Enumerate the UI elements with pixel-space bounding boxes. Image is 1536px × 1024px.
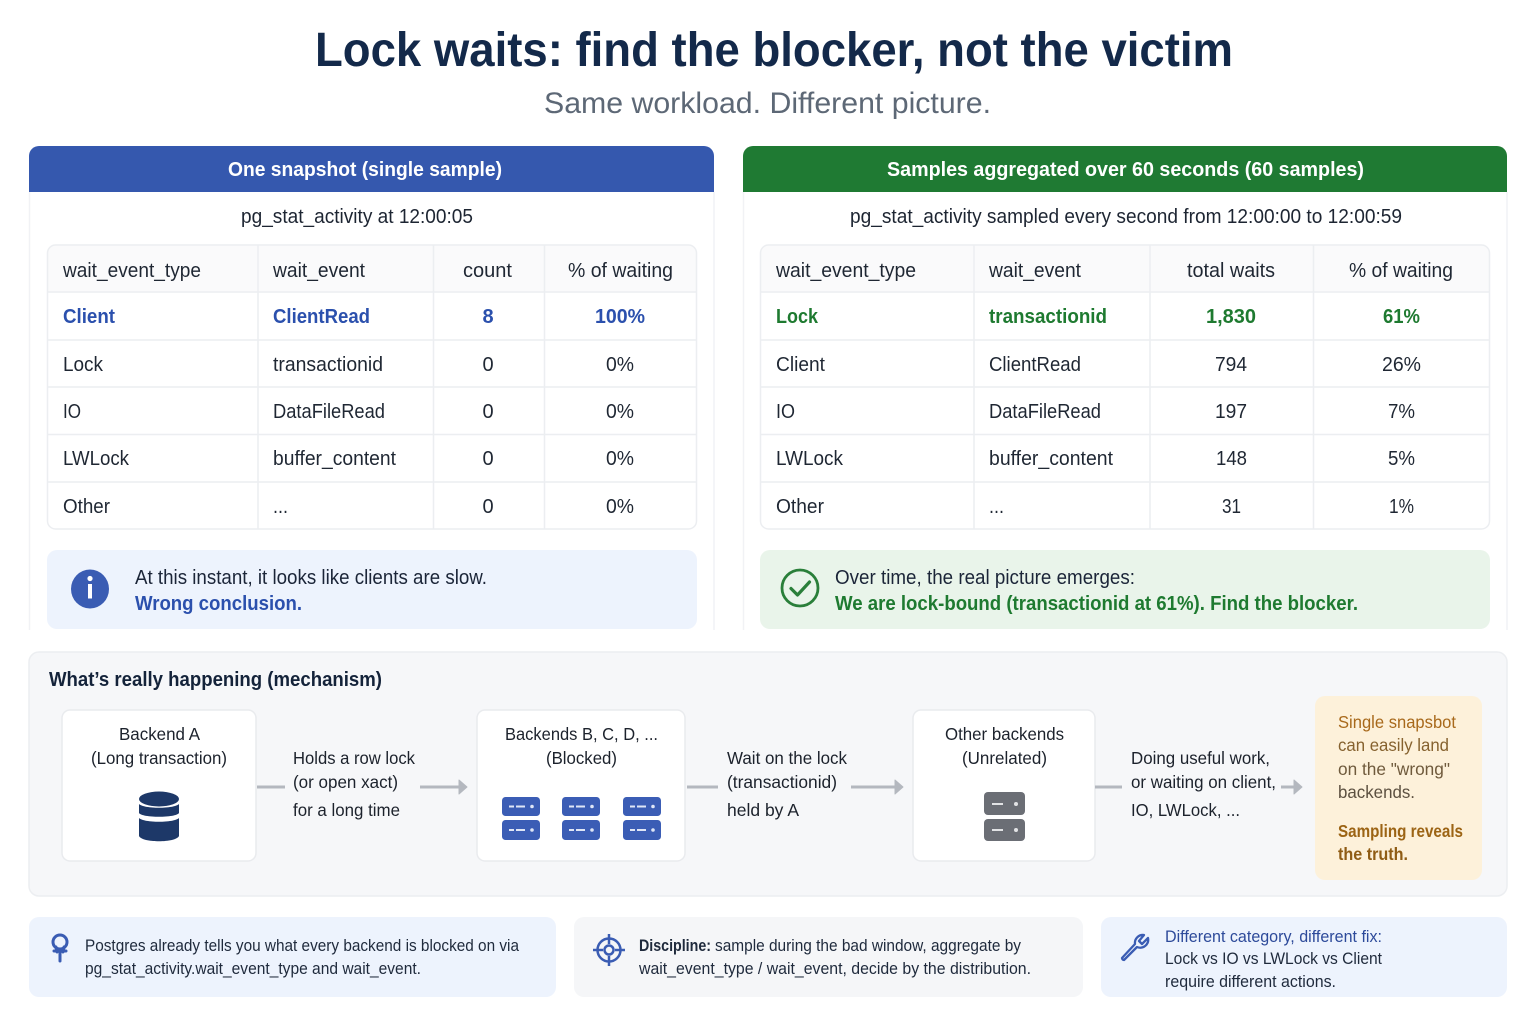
table: snapshot wait events: ... [273, 496, 288, 518]
callout: sampling note: backends. [1338, 782, 1415, 802]
callout: sampling note: on the "wrong" [1338, 759, 1450, 779]
table: snapshot wait events: transactionid [273, 354, 383, 376]
table: aggregated wait events: buffer_content [989, 448, 1113, 470]
mechanism heading: What’s really happening (mechanism) [49, 669, 382, 691]
panel caption: snapshot time: pg_stat_activity at 12:00:05 [241, 206, 473, 228]
table: aggregated wait events: LWLock [776, 448, 844, 470]
table: snapshot wait events: ClientRead [273, 306, 370, 328]
callout: discipline [574, 917, 1083, 997]
table: snapshot wait events: wait_event [272, 260, 365, 282]
table: aggregated wait events: ClientRead [989, 354, 1081, 376]
table: snapshot wait events: IO [63, 401, 81, 423]
table: aggregated wait events: Client [776, 354, 825, 376]
table: aggregated wait events: 1% [1389, 496, 1414, 518]
connector: other to note: or waiting on client, [1131, 772, 1276, 792]
callout: different fix: Lock vs IO vs LWLock vs Client [1165, 950, 1382, 968]
callout: different fix: Different category, different fix: [1165, 928, 1382, 946]
box: blocked backends: Backends B, C, D, ... [505, 724, 658, 744]
table: aggregated wait events: 26% [1382, 354, 1421, 376]
table: aggregated wait events: 1,830 [1206, 306, 1256, 328]
callout: wrong conclusion: Wrong conclusion. [135, 593, 302, 615]
table: aggregated wait events: 7% [1388, 401, 1415, 423]
connector: blocked to other [687, 748, 903, 820]
table: aggregated wait events: wait_event [988, 260, 1081, 282]
table: snapshot wait events: wait_event_type [62, 260, 201, 282]
table: aggregated wait events [760, 245, 1490, 529]
table: snapshot wait events: 0% [606, 401, 634, 423]
table: aggregated wait events: 148 [1216, 448, 1247, 470]
table: snapshot wait events: 100% [595, 306, 645, 328]
table: snapshot wait events: Other [63, 496, 110, 518]
table: snapshot wait events: DataFileRead [273, 401, 385, 423]
callout: real picture [760, 550, 1490, 629]
icon: wrench [1122, 935, 1148, 960]
table: snapshot wait events: 0% [606, 448, 634, 470]
title: Lock waits: find the blocker, not the victim [315, 24, 1233, 77]
connector: blocked to other: (transactionid) [727, 772, 837, 792]
box: blocked backends [477, 710, 685, 861]
callout: postgres tells you: pg_stat_activity.wait_event_type and wait_event. [85, 960, 421, 978]
table: aggregated wait events: Lock [776, 306, 819, 328]
table: snapshot wait events: Client [63, 306, 115, 328]
icon: database [139, 792, 179, 841]
callout: discipline: sample during the bad window, aggregate by [715, 937, 1022, 955]
table: aggregated wait events: Other [776, 496, 824, 518]
callout: discipline: wait_event_type / wait_event, decide by the distribution. [638, 960, 1031, 978]
table: aggregated wait events: ... [989, 496, 1004, 518]
table: snapshot wait events: LWLock [63, 448, 130, 470]
callout: sampling note [1315, 696, 1482, 880]
connector: other to note [1095, 748, 1302, 820]
table: snapshot wait events: count [463, 260, 512, 282]
connector: other to note: Doing useful work, [1131, 748, 1270, 768]
table: snapshot wait events: buffer_content [273, 448, 396, 470]
callout: discipline: Discipline: [639, 937, 711, 955]
callout: different fix: require different actions. [1165, 973, 1336, 991]
table: aggregated wait events: 31 [1222, 496, 1241, 518]
callout: sampling note: Sampling reveals [1338, 821, 1463, 841]
connector: blocked to other: held by A [727, 800, 799, 820]
panel caption: sampling window: pg_stat_activity sampled every second from 12:00:00 to 12:00:59 [850, 206, 1402, 228]
table: snapshot wait events: 0 [482, 354, 494, 376]
box: other backends [913, 710, 1095, 861]
panel: aggregated samples [743, 146, 1507, 630]
table: snapshot wait events [47, 245, 697, 529]
callout: sampling note: the truth. [1338, 844, 1408, 864]
icon: info [71, 570, 109, 608]
callout: sampling note: Single snapsbot [1338, 712, 1456, 732]
callout: postgres tells you: Postgres already tells you what every backend is blocked on via [85, 937, 520, 955]
table: aggregated wait events: 794 [1215, 354, 1247, 376]
panel: mechanism [29, 652, 1507, 997]
panel header: aggregated samples: Samples aggregated over 60 seconds (60 samples) [887, 159, 1364, 181]
table: snapshot wait events: 0 [482, 401, 494, 423]
callout: wrong conclusion [47, 550, 697, 629]
table: snapshot wait events: 8 [482, 306, 494, 328]
table: aggregated wait events: % of waiting [1349, 260, 1453, 282]
box: blocked backends: (Blocked) [546, 748, 617, 768]
callout: real picture: We are lock-bound (transactionid at 61%). Find the blocker. [835, 593, 1358, 615]
box: other backends: (Unrelated) [962, 748, 1047, 768]
table: aggregated wait events: total waits [1187, 260, 1275, 282]
connector: blocked to other: Wait on the lock [727, 748, 847, 768]
table: snapshot wait events: % of waiting [568, 260, 673, 282]
box: backend A: Backend A [119, 724, 200, 744]
box: backend A: (Long transaction) [91, 748, 227, 768]
table: snapshot wait events: 0% [606, 354, 634, 376]
callout: real picture: Over time, the real picture emerges: [835, 567, 1135, 589]
callout: different fix [1101, 917, 1507, 997]
table: aggregated wait events: 61% [1383, 306, 1420, 328]
panel: one snapshot [29, 146, 714, 630]
subtitle: Same workload. Different picture. [544, 87, 991, 120]
table: aggregated wait events: IO [776, 401, 795, 423]
connector: backend A to blocked: Holds a row lock [293, 748, 415, 768]
panel header: one snapshot: One snapshot (single sample) [228, 159, 502, 181]
box: other backends: Other backends [945, 724, 1064, 744]
callout: postgres tells you [29, 917, 556, 997]
table: aggregated wait events: DataFileRead [989, 401, 1101, 423]
panel header: one snapshot [29, 146, 714, 192]
icon: idle server [984, 792, 1025, 841]
icon: pin [53, 935, 67, 961]
table: snapshot wait events: 0 [482, 448, 494, 470]
connector: backend A to blocked [257, 748, 467, 820]
callout: sampling note: can easily land [1338, 735, 1449, 755]
icon: check circle [782, 570, 818, 606]
icon: blocked servers [502, 797, 661, 840]
table: snapshot wait events: Lock [63, 354, 104, 376]
connector: backend A to blocked: (or open xact) [293, 772, 398, 792]
table: aggregated wait events: 5% [1388, 448, 1415, 470]
callout: wrong conclusion: At this instant, it looks like clients are slow. [135, 567, 487, 589]
icon: target [593, 934, 625, 966]
box: backend A [62, 710, 256, 861]
table: aggregated wait events: 197 [1215, 401, 1247, 423]
panel header: aggregated samples [743, 146, 1507, 192]
connector: other to note: IO, LWLock, ... [1131, 800, 1240, 820]
table: snapshot wait events: 0 [482, 496, 494, 518]
table: aggregated wait events: transactionid [989, 306, 1107, 328]
table: aggregated wait events: wait_event_type [775, 260, 916, 282]
connector: backend A to blocked: for a long time [293, 800, 400, 820]
table: snapshot wait events: 0% [606, 496, 634, 518]
